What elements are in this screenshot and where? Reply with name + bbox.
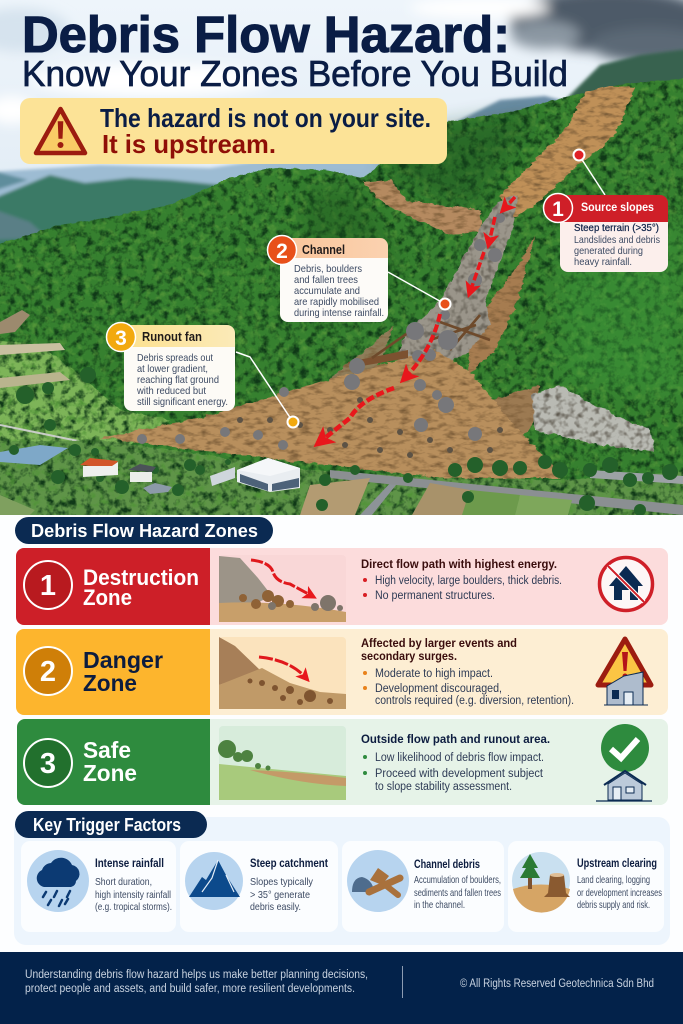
callout 2: channel: Debris, boulders	[294, 263, 362, 275]
heading: hazard zones	[15, 517, 273, 544]
factory building	[210, 458, 300, 492]
right channel banks	[468, 235, 535, 375]
icon: no building	[600, 558, 652, 610]
panel: destruction zone: High velocity, large boulders, thick debris.	[375, 575, 562, 587]
card: intense rainfall: Short duration,	[95, 876, 152, 888]
cliff	[532, 385, 655, 452]
callout: hazard warning	[20, 98, 447, 164]
callout 2: channel: accumulate and	[294, 285, 360, 297]
callout: hazard warning: It is upstream.	[102, 129, 276, 159]
hero landscape illustration	[0, 0, 683, 515]
callout 2: channel: are rapidly mobilised	[294, 296, 379, 308]
panel: destruction zone	[16, 548, 668, 625]
panel: danger zone: secondary surges.	[361, 649, 457, 663]
panel: danger zone	[16, 629, 668, 715]
panel: safe zone: to slope stability assessment.	[375, 781, 512, 793]
callout 3: runout fan: still significant energy.	[137, 396, 228, 408]
title: Know Your Zones Before You Build	[22, 53, 568, 94]
callout 1: source slopes: Landslides and debris	[574, 234, 660, 246]
panel: danger zone: 2	[40, 656, 56, 688]
panel: danger zone: Danger	[83, 647, 163, 673]
red flow arrows	[320, 197, 515, 442]
panel: destruction zone: 1	[40, 570, 56, 602]
panel: destruction zone: No permanent structures.	[375, 590, 495, 602]
forest shading	[300, 110, 683, 400]
callout 3: runout fan: at lower gradient,	[137, 363, 208, 375]
callout 2: channel: during intense rainfall.	[294, 307, 384, 319]
panel: key trigger factors: Key Trigger Factors	[33, 815, 181, 835]
heading: hazard zones: Debris Flow Hazard Zones	[31, 521, 258, 541]
logs and boulders	[137, 213, 505, 458]
card: channel debris	[342, 841, 504, 932]
callout 2: channel: 2	[276, 240, 288, 263]
illustration: runout slope	[219, 637, 346, 709]
callout 2: channel: Channel	[302, 243, 345, 257]
callout 1: source slopes: heavy rainfall.	[574, 256, 632, 268]
distant mountains	[0, 48, 683, 260]
footer: Understanding debris flow hazard helps us make better planning decisions,	[25, 969, 368, 981]
town trees	[9, 367, 678, 516]
callout 2: channel: and fallen trees	[294, 274, 358, 286]
card: steep catchment: Slopes typically	[250, 876, 314, 888]
card: channel debris: Channel debris	[414, 859, 480, 871]
card: intense rainfall: Intense rainfall	[95, 858, 164, 870]
panel: danger zone: controls required (e.g. diversion, retention).	[375, 695, 574, 707]
title	[22, 6, 568, 94]
callout 1: source slopes	[544, 150, 668, 272]
footer: © All Rights Reserved Geotechnica Sdn Bhd	[460, 978, 654, 990]
main forest	[0, 76, 683, 480]
callout 3: runout fan: Debris spreads out	[137, 352, 213, 364]
panel: safe zone	[17, 719, 668, 805]
callout 3: runout fan: 3	[115, 327, 127, 350]
card: steep catchment: > 35° generate	[250, 889, 310, 901]
callout 1: source slopes: Steep terrain (>35°)	[574, 222, 659, 234]
card: intense rainfall: (e.g. tropical storms).	[95, 901, 172, 913]
panel: destruction zone: Zone	[83, 585, 132, 610]
footer	[0, 952, 683, 1024]
icon: warning triangle	[36, 109, 85, 153]
title: Debris Flow Hazard:	[22, 6, 510, 63]
panel: destruction zone: Destruction	[83, 565, 199, 590]
runout fan	[100, 350, 560, 478]
storm clouds	[0, 0, 683, 124]
panel: danger zone: Affected by larger events and	[361, 636, 517, 650]
card: intense rainfall	[21, 841, 176, 932]
panel: destruction zone: Direct flow path with highest energy.	[361, 557, 557, 571]
icon: warning with house	[598, 639, 651, 705]
card: channel debris: sediments and fallen trees	[414, 887, 501, 899]
footer: protect people and assets, and build safer, more resilient developments.	[25, 983, 355, 995]
debris channel	[395, 195, 518, 368]
panel: safe zone: Proceed with development subject	[375, 768, 544, 780]
card: upstream clearing	[508, 841, 664, 932]
callout 1: source slopes: generated during	[574, 245, 643, 257]
card: upstream clearing: Land clearing, logging	[577, 874, 650, 886]
card: steep catchment	[180, 841, 338, 932]
panel: safe zone: Zone	[83, 760, 137, 786]
callout 2: channel	[268, 236, 450, 322]
card: upstream clearing: Upstream clearing	[577, 858, 657, 870]
callout 3: runout fan	[106, 322, 298, 428]
callout 3: runout fan: Runout fan	[142, 330, 202, 344]
callout 3: runout fan: reaching flat ground	[137, 374, 219, 386]
panel: safe zone: Outside flow path and runout area.	[361, 732, 550, 746]
foreground ground and roads	[0, 440, 683, 530]
callout: hazard warning: The hazard is not on your site.	[100, 103, 431, 133]
panel: key trigger factors	[14, 811, 670, 945]
card: upstream clearing: debris supply and risk.	[577, 899, 650, 911]
callout 1: source slopes: 1	[552, 198, 564, 221]
icon: check with house	[596, 724, 652, 801]
houses	[80, 458, 172, 494]
upper landslide scar	[500, 86, 635, 220]
illustration: safe field	[218, 726, 346, 800]
card: channel debris: Accumulation of boulders,	[414, 874, 501, 886]
panel: danger zone: Moderate to high impact.	[375, 668, 493, 680]
callout 3: runout fan: with reduced but	[136, 385, 206, 397]
panel: safe zone: Safe	[83, 737, 131, 763]
card: steep catchment: Steep catchment	[250, 858, 328, 870]
card: steep catchment: debris easily.	[250, 901, 301, 913]
card: intense rainfall: high intensity rainfall	[95, 889, 171, 901]
panel: danger zone: Zone	[83, 670, 137, 696]
panel: danger zone: Development discouraged,	[375, 683, 502, 695]
callout 1: source slopes: Source slopes	[581, 200, 654, 214]
panel: safe zone: Low likelihood of debris flow impact.	[375, 752, 544, 764]
illustration: boulder flow	[219, 555, 346, 622]
panel: safe zone: 3	[40, 748, 56, 780]
card: channel debris: in the channel.	[414, 899, 465, 911]
valley fields	[0, 338, 170, 455]
